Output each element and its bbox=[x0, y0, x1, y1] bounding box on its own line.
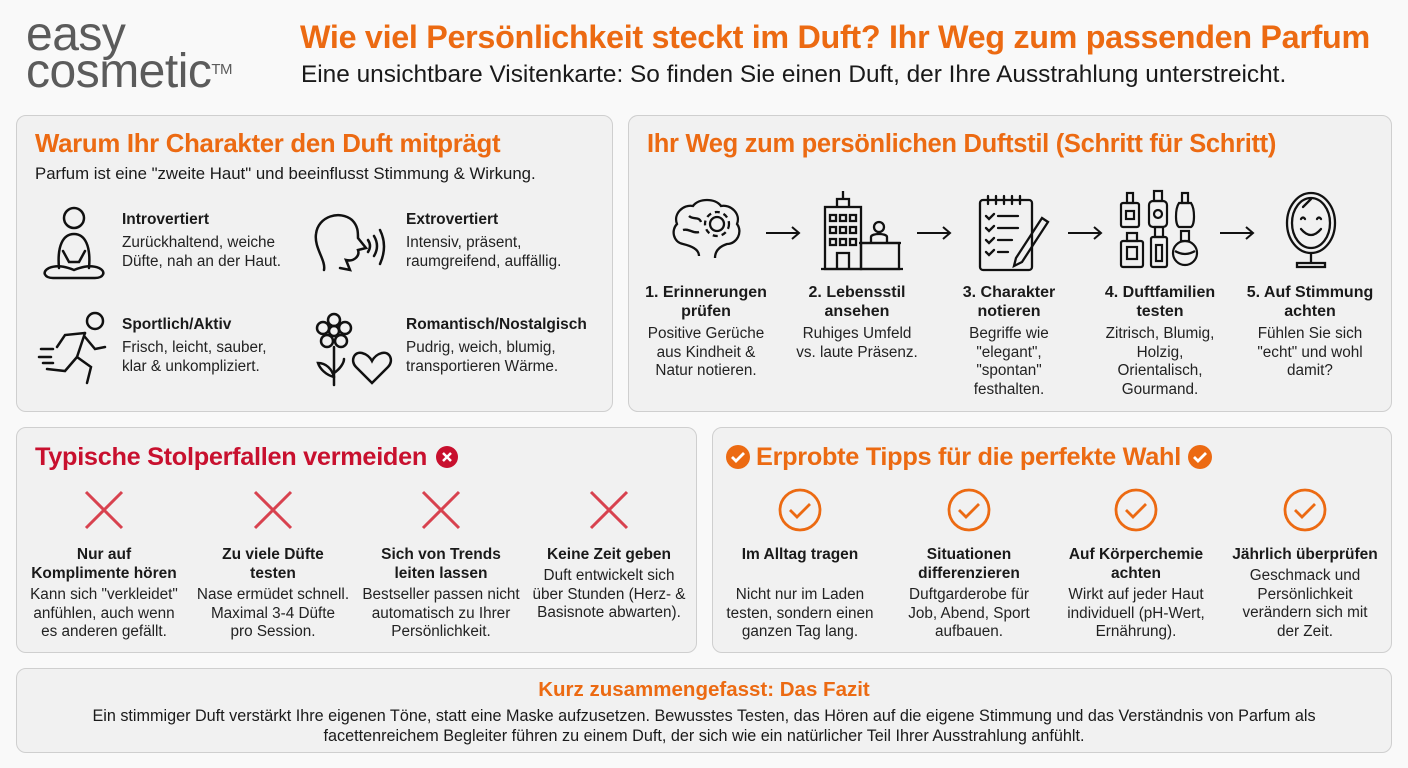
step 3 bbox=[963, 284, 1055, 398]
step 5: damit? bbox=[1287, 362, 1333, 379]
conclusion text: facettenreichem Begleiter führen zu einem Duft, der sich wie ein natürlicher Teil Ihrer Ausstrahlung anfühlt. bbox=[324, 726, 1084, 744]
tip 1: Im Alltag tragen bbox=[742, 546, 858, 563]
step 2: 2. Lebensstil bbox=[809, 284, 905, 301]
arrow bbox=[1220, 226, 1254, 240]
pitfall 3: Bestseller passen nicht bbox=[362, 586, 520, 603]
step 1: Natur notieren. bbox=[655, 362, 757, 379]
pitfall 4: Keine Zeit geben bbox=[547, 546, 671, 563]
item: extrovertiert bbox=[406, 211, 561, 270]
item: extrovertiert: raumgreifend, auffällig. bbox=[406, 252, 561, 270]
pitfall 3: leiten lassen bbox=[394, 565, 488, 582]
subtitle: Eine unsichtbare Visitenkarte: So finden Sie einen Duft, der Ihre Ausstrahlung unterstreicht. bbox=[301, 61, 1286, 88]
item: romantisch bbox=[406, 316, 587, 374]
pitfall 1: Komplimente hören bbox=[31, 565, 177, 582]
step 3: 3. Charakter bbox=[963, 284, 1055, 301]
tip 4: Jährlich überprüfen bbox=[1232, 546, 1378, 563]
pitfall 1: anfühlen, auch wenn bbox=[33, 604, 175, 622]
icon: mirror bbox=[1286, 192, 1336, 268]
step 5: achten bbox=[1284, 303, 1336, 320]
logo: easy bbox=[26, 8, 125, 61]
item: introvertiert bbox=[122, 211, 281, 270]
tip 2: aufbauen. bbox=[935, 623, 1003, 640]
panel: tips bbox=[712, 427, 1392, 653]
icon: building bbox=[821, 191, 903, 270]
tip 3 bbox=[1067, 488, 1205, 640]
item: extrovertiert: Extrovertiert bbox=[406, 211, 498, 228]
pitfall 2: Zu viele Düfte bbox=[222, 546, 324, 563]
step 4: Holzig, bbox=[1137, 344, 1183, 360]
step 3: "spontan" bbox=[976, 362, 1042, 379]
item: introvertiert: Düfte, nah an der Haut. bbox=[122, 252, 281, 270]
logo bbox=[26, 8, 232, 98]
step 2: ansehen bbox=[825, 303, 889, 320]
step 4: testen bbox=[1136, 303, 1184, 320]
icon: brain bbox=[672, 198, 741, 258]
pitfall 4: Basisnote abwarten). bbox=[537, 604, 681, 621]
pitfall 1 bbox=[30, 491, 178, 640]
pitfall 1: Kann sich "verkleidet" bbox=[30, 586, 178, 603]
step 5: "echt" und wohl bbox=[1257, 344, 1363, 360]
step 3: Begriffe wie bbox=[969, 325, 1049, 342]
icon: flower heart bbox=[316, 312, 392, 386]
tip 4: Geschmack und bbox=[1250, 567, 1360, 584]
tip 2: Situationen bbox=[927, 546, 1011, 563]
conclusion heading: Kurz zusammengefasst: Das Fazit bbox=[538, 678, 870, 701]
step 1: Positive Gerüche bbox=[648, 325, 764, 342]
item: sportlich: Frisch, leicht, sauber, bbox=[122, 339, 267, 356]
item: sportlich bbox=[122, 316, 267, 374]
tip 1 bbox=[726, 488, 874, 640]
item: introvertiert: Zurückhaltend, weiche bbox=[122, 234, 275, 251]
pitfall 1: Nur auf bbox=[77, 546, 131, 563]
heading with x icon: Typische Stolperfallen vermeiden bbox=[35, 443, 427, 471]
item: sportlich: klar & unkompliziert. bbox=[122, 358, 260, 374]
arrow bbox=[917, 226, 952, 240]
tip 3: Ernährung). bbox=[1096, 623, 1176, 640]
tip 3: Wirkt auf jeder Haut bbox=[1068, 586, 1204, 603]
pitfall 3 bbox=[362, 491, 520, 640]
tip 3: individuell (pH-Wert, bbox=[1067, 604, 1205, 622]
step 4: 4. Duftfamilien bbox=[1105, 284, 1215, 301]
item: romantisch: Romantisch/Nostalgisch bbox=[406, 316, 587, 333]
pitfall 2: Nase ermüdet schnell. bbox=[197, 586, 349, 603]
tip 4: verändern sich mit bbox=[1242, 604, 1367, 621]
item: romantisch: transportieren Wärme. bbox=[406, 358, 558, 374]
tip 2 bbox=[908, 488, 1030, 640]
panel: conclusion bbox=[16, 668, 1392, 753]
title: Wie viel Persönlichkeit steckt im Duft? Ihr Weg zum passenden Parfum bbox=[300, 19, 1370, 55]
panel: steps bbox=[628, 115, 1392, 412]
arrow bbox=[1068, 226, 1102, 240]
step 5 bbox=[1247, 284, 1373, 379]
step 3: festhalten. bbox=[974, 380, 1044, 398]
tip 3: achten bbox=[1111, 565, 1161, 582]
tip 3: Auf Körperchemie bbox=[1069, 546, 1203, 563]
step 2 bbox=[796, 284, 918, 360]
tip 1: testen, sondern einen bbox=[726, 604, 874, 622]
step 1: 1. Erinnerungen bbox=[645, 284, 767, 301]
intro text: Parfum ist eine "zweite Haut" und beeinflusst Stimmung & Wirkung. bbox=[35, 164, 536, 183]
item: sportlich: Sportlich/Aktiv bbox=[122, 316, 231, 333]
pitfall 4 bbox=[532, 491, 686, 621]
arrow bbox=[766, 226, 800, 240]
tip 2: Duftgarderobe für bbox=[909, 586, 1029, 603]
pitfall 2: testen bbox=[250, 565, 296, 582]
icon: checklist pencil bbox=[978, 194, 1050, 272]
step 2: Ruhiges Umfeld bbox=[803, 325, 911, 342]
tip 4: Persönlichkeit bbox=[1257, 586, 1353, 602]
tip 4: der Zeit. bbox=[1277, 622, 1333, 640]
heading with checks: Erprobte Tipps für die perfekte Wahl bbox=[756, 443, 1181, 471]
icon: speaking head bbox=[314, 214, 386, 272]
item: introvertiert: Introvertiert bbox=[122, 211, 209, 228]
panel: character bbox=[16, 115, 613, 412]
pitfall 3: Sich von Trends bbox=[381, 546, 501, 563]
step 3: "elegant", bbox=[976, 344, 1042, 360]
step 4 bbox=[1105, 284, 1215, 398]
icon: runner bbox=[38, 312, 106, 384]
pitfall 3: automatisch zu Ihrer bbox=[372, 604, 510, 622]
step 4: Gourmand. bbox=[1122, 380, 1198, 398]
step 5: 5. Auf Stimmung bbox=[1247, 284, 1373, 301]
tip 4 bbox=[1232, 488, 1378, 640]
item: romantisch: Pudrig, weich, blumig, bbox=[406, 339, 556, 356]
pitfall 2: Maximal 3-4 Düfte bbox=[211, 604, 335, 622]
pitfall 1: es anderen gefällt. bbox=[41, 623, 167, 640]
pitfall 2: pro Session. bbox=[230, 623, 316, 640]
logo: cosmeticTM bbox=[26, 45, 232, 98]
heading: Ihr Weg zum persönlichen Duftstil (Schritt für Schritt) bbox=[647, 130, 1276, 158]
tip 1: ganzen Tag lang. bbox=[742, 623, 858, 640]
tip 2: Job, Abend, Sport bbox=[908, 604, 1030, 622]
icon: perfume bottles bbox=[1120, 190, 1198, 268]
step 4: Orientalisch, bbox=[1117, 362, 1202, 379]
step 5: Fühlen Sie sich bbox=[1258, 325, 1362, 342]
step 1 bbox=[645, 284, 767, 379]
step 2: vs. laute Präsenz. bbox=[796, 344, 918, 360]
heading: Warum Ihr Charakter den Duft mitprägt bbox=[35, 130, 500, 158]
panel: pitfalls bbox=[16, 427, 697, 653]
item: extrovertiert: Intensiv, präsent, bbox=[406, 234, 521, 251]
tip 1: Nicht nur im Laden bbox=[736, 586, 864, 603]
conclusion text bbox=[92, 707, 1316, 744]
pitfall 4: Duft entwickelt sich bbox=[544, 567, 674, 584]
step 3: notieren bbox=[977, 303, 1041, 320]
step 4: Zitrisch, Blumig, bbox=[1106, 325, 1214, 342]
pitfall 4: über Stunden (Herz- & bbox=[532, 586, 686, 602]
conclusion text: Ein stimmiger Duft verstärkt Ihre eigenen Töne, statt eine Maske aufzusetzen. Bewusstes Testen, das Hören auf die eigene Stimmung und das Verständnis von Parfum als bbox=[92, 707, 1316, 725]
icon: meditation bbox=[43, 206, 105, 280]
pitfall 3: Persönlichkeit. bbox=[391, 623, 491, 640]
step 1: aus Kindheit & bbox=[657, 344, 755, 360]
tip 2: differenzieren bbox=[918, 565, 1020, 582]
step 1: prüfen bbox=[681, 303, 731, 320]
pitfall 2 bbox=[197, 491, 349, 640]
